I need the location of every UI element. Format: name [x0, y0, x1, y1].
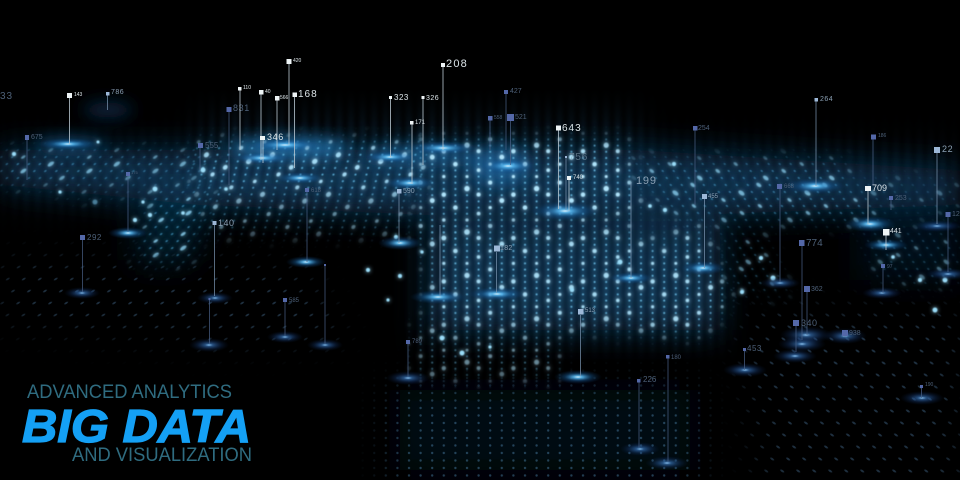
marker: 323: 323: [394, 93, 409, 102]
marker: 340: [793, 318, 818, 352]
dots: dim lower right: [728, 302, 960, 472]
marker: 420: [286, 58, 302, 145]
marker: 175: [126, 170, 138, 232]
marker: 22: [934, 144, 953, 224]
marker: 441: 441: [890, 228, 902, 235]
marker: 668: 668: [784, 184, 795, 190]
marker: 521: 521: [515, 114, 527, 121]
marker: 455: 455: [708, 194, 719, 200]
dots: top central block: [406, 126, 644, 247]
marker: 362: 362: [811, 286, 823, 293]
marker: 12: 12: [952, 211, 960, 218]
marker: 264: 264: [820, 96, 833, 103]
title: big data: BIG DATA: [22, 400, 251, 452]
dots: left band and arc: [0, 141, 220, 271]
marker: 171: 171: [415, 120, 426, 126]
marker: 566: [275, 95, 289, 150]
marker: 774: 774: [806, 238, 823, 249]
marker: 199: 199: [636, 175, 657, 187]
marker: 254: [693, 125, 710, 205]
marker: 143: 143: [74, 92, 83, 98]
marker: 346: [260, 132, 284, 163]
scattered highlight dots: [12, 140, 947, 355]
marker: 253: 253: [895, 195, 907, 202]
marker: 831: [226, 103, 250, 185]
marker: 585: [283, 298, 300, 336]
marker: 668: [777, 184, 795, 282]
marker: 199: [631, 175, 657, 278]
marker: 12: [946, 211, 960, 272]
marker: 756: [565, 152, 588, 210]
marker: 292: [80, 233, 102, 292]
marker: 264: [814, 96, 833, 186]
marker: 226: [637, 375, 657, 448]
marker: 175: 175: [131, 170, 138, 175]
glow pools on the terrain: [38, 138, 960, 470]
marker: 110: 110: [243, 85, 251, 91]
marker: 180: [666, 355, 682, 462]
marker: 140: [212, 218, 235, 296]
title: advanced analytics: ADVANCED ANALYTICS: [27, 381, 232, 403]
marker: 186: 186: [878, 133, 887, 139]
marker: 455: [702, 194, 719, 268]
marker: 675: [25, 134, 43, 180]
marker: 340: 340: [801, 318, 818, 328]
marker: 789: [406, 339, 423, 377]
marker: 938: [842, 330, 861, 337]
marker: 182: 182: [500, 245, 513, 252]
marker: 346: 346: [267, 132, 284, 142]
marker: stem at 325: [324, 264, 326, 344]
marker: 226: 226: [643, 375, 657, 384]
marker: 555: 555: [205, 141, 219, 150]
marker: 254: 254: [698, 125, 710, 132]
marker: 97: 97: [887, 264, 893, 270]
marker: 33: 33: [0, 91, 13, 102]
marker: 513: [578, 308, 596, 376]
marker: 427: 427: [510, 88, 522, 95]
marker: 190: [920, 382, 934, 398]
marker: 585: 585: [289, 298, 300, 304]
title block: [22, 381, 252, 466]
dots: centre-left band: [181, 128, 435, 248]
marker: 22: 22: [942, 144, 953, 154]
marker: 168: [292, 89, 318, 168]
dots: dim lower left: [0, 242, 353, 352]
marker: 566: 566: [280, 95, 289, 101]
marker: 786: [106, 89, 124, 110]
marker: 326: [422, 95, 439, 165]
marker: 180: 180: [671, 355, 682, 361]
marker: 97: [881, 264, 893, 293]
marker: 190: 190: [925, 382, 934, 388]
marker: 643: 643: [562, 123, 582, 134]
marker: 323: [389, 93, 409, 157]
marker: 362: [804, 286, 823, 335]
marker: stem at 209: [208, 298, 210, 344]
marker: 740: 740: [573, 175, 584, 181]
marker: 558: 558: [494, 115, 503, 121]
marker: 756: 756: [569, 152, 588, 163]
marker: 143: [67, 92, 83, 144]
marker: 618: [305, 188, 322, 262]
marker: 453: [743, 344, 762, 370]
marker: 420: 420: [293, 58, 302, 64]
marker: 938: 938: [849, 330, 861, 337]
title: and visualization: AND VISUALIZATION: [72, 444, 252, 466]
marker: 590: [397, 188, 415, 243]
marker: 208: [441, 58, 468, 150]
dots: centre block: [406, 213, 736, 389]
marker: 558: [488, 115, 503, 150]
marker: 555: [198, 141, 219, 170]
marker: 182: [494, 245, 513, 293]
marker: 140: 140: [218, 218, 235, 228]
marker: 675: 675: [31, 134, 43, 141]
marker: 521: [507, 114, 527, 165]
marker: 786: 786: [111, 89, 124, 96]
marker: stem at 440: [439, 225, 441, 296]
marker: 40: [259, 89, 271, 160]
dots: dim lower centre: [373, 370, 712, 477]
marker: 590: 590: [403, 188, 415, 195]
marker: 831: 831: [233, 103, 250, 113]
marker: 740: [567, 175, 584, 211]
marker: 186: [871, 133, 887, 185]
marker: 441: [883, 228, 902, 250]
dots: right band: [625, 148, 960, 306]
marker: 208: 208: [446, 58, 468, 70]
marker: 171: [410, 120, 426, 184]
marker: 709: 709: [872, 183, 887, 193]
marker: 618: 618: [311, 188, 322, 194]
marker: 789: 789: [412, 339, 423, 345]
marker: 453: 453: [747, 344, 762, 353]
marker: 292: 292: [87, 233, 102, 242]
marker: 427: [504, 88, 522, 150]
marker: 168: 168: [298, 89, 318, 100]
glow: blue haze across the data terrain: [0, 102, 960, 470]
marker: 110: [238, 85, 251, 150]
marker: 513: 513: [585, 308, 596, 314]
marker: 253: [889, 195, 907, 210]
marker: 40: 40: [265, 89, 271, 95]
marker: 774: [799, 238, 823, 340]
marker: 709: [865, 183, 887, 224]
marker: 326: 326: [426, 95, 439, 102]
marker: 643: [556, 123, 582, 209]
vertical light streaks: [2, 108, 956, 349]
